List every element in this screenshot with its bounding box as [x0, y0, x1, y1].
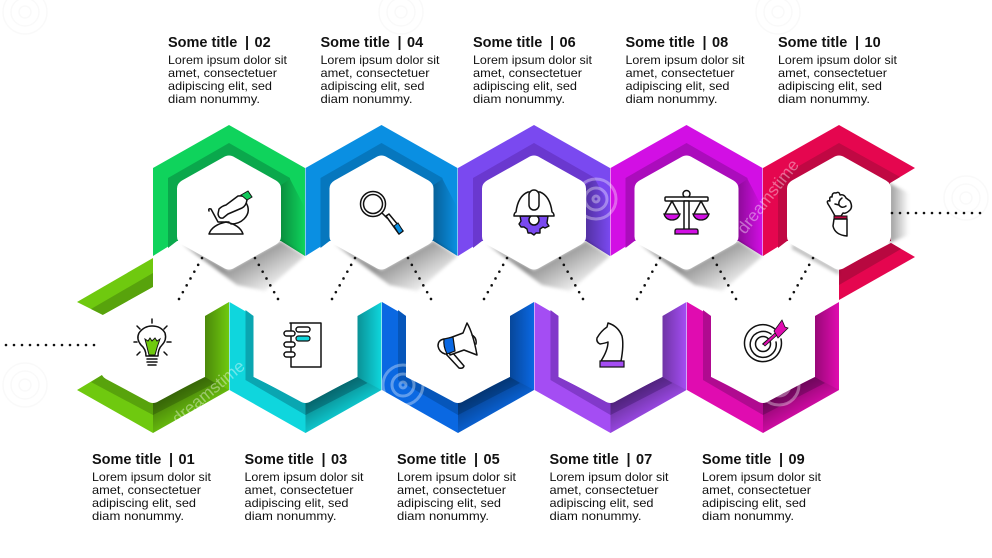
icon: chess knight	[597, 323, 624, 367]
white hexagons	[101, 156, 891, 403]
text: step 09: diam nonummy.	[702, 510, 794, 523]
text: step 04: Some title	[320, 35, 390, 51]
icon: balance scales	[664, 190, 709, 234]
text: step 10	[778, 35, 898, 106]
text: step 08: Lorem ipsum dolor sit	[626, 54, 745, 67]
hexagon 06 band	[458, 125, 610, 291]
watermark marks on bands: dreamstime	[733, 156, 803, 237]
hexagon 03 band	[230, 302, 382, 433]
icon: ok hand	[827, 192, 852, 236]
text: step 03: diam nonummy.	[244, 510, 336, 523]
text: step 08	[626, 35, 745, 106]
text: step 07: diam nonummy.	[550, 510, 642, 523]
text: step 02: Lorem ipsum dolor sit	[168, 54, 288, 67]
dotted line: start	[6, 344, 102, 346]
text: step 04: amet, consectetuer	[320, 67, 430, 80]
text: step 06: Lorem ipsum dolor sit	[473, 54, 593, 67]
text: step 01: Lorem ipsum dolor sit	[92, 471, 212, 484]
text: step 05: Lorem ipsum dolor sit	[397, 471, 517, 484]
text: step 02: |	[245, 35, 249, 51]
text: step 10: Lorem ipsum dolor sit	[778, 54, 898, 67]
text: step 05: diam nonummy.	[397, 510, 489, 523]
text: step 06: Some title	[473, 35, 542, 51]
text: step 05: amet, consectetuer	[397, 484, 506, 497]
text: step 08: adipiscing elit, sed	[626, 80, 730, 93]
text: step 10: amet, consectetuer	[778, 67, 887, 80]
text: step 03: amet, consectetuer	[244, 484, 354, 497]
text: step 01	[92, 452, 212, 523]
text: step 06: amet, consectetuer	[473, 67, 582, 80]
text: step 04: Lorem ipsum dolor sit	[320, 54, 440, 67]
text: step 07: Lorem ipsum dolor sit	[550, 471, 669, 484]
icon: light bulb	[134, 319, 171, 365]
hexagon 10 band	[763, 125, 915, 300]
hexagon 01 band	[77, 258, 229, 433]
text: step 07: 07	[636, 452, 652, 468]
text: step 06: diam nonummy.	[473, 93, 565, 106]
dotted connectors	[179, 258, 813, 299]
text: step 07: |	[626, 452, 631, 468]
text: step 02	[168, 35, 288, 106]
text: step 05: |	[474, 452, 478, 468]
text: step 07: adipiscing elit, sed	[550, 497, 654, 510]
hexagon 02 band	[153, 125, 305, 291]
text: step 10: Some title	[778, 35, 847, 51]
text: step 09	[702, 452, 822, 523]
text: step 05: adipiscing elit, sed	[397, 497, 501, 510]
text: step 08: |	[702, 35, 707, 51]
text: step 10: 10	[864, 35, 881, 51]
text: step 04: 04	[407, 35, 423, 51]
hexagon 05 band	[382, 302, 534, 433]
text: step 01: 01	[178, 452, 195, 468]
text: step 09: adipiscing elit, sed	[702, 497, 806, 510]
text: step 05: 05	[484, 452, 500, 468]
text: step 01: amet, consectetuer	[92, 484, 201, 497]
text: step 01: diam nonummy.	[92, 510, 184, 523]
text: step 02: 02	[254, 35, 271, 51]
icon: microscope	[209, 191, 252, 234]
text: step 10: diam nonummy.	[778, 93, 870, 106]
text: step 07: Some title	[550, 452, 619, 468]
text: step 08: Some title	[626, 35, 695, 51]
text: step 01: adipiscing elit, sed	[92, 497, 196, 510]
text: step 04: |	[398, 35, 402, 51]
text: step 02: diam nonummy.	[168, 93, 260, 106]
text: step 05: Some title	[397, 452, 466, 468]
hexagon 08 band	[610, 125, 762, 291]
text: step 07	[550, 452, 669, 523]
text: step 10: |	[855, 35, 859, 51]
text: step 09: amet, consectetuer	[702, 484, 811, 497]
icon: megaphone	[438, 323, 477, 368]
icon: magnifier	[360, 192, 403, 234]
text: step 07: amet, consectetuer	[550, 484, 659, 497]
text: step 09: 09	[788, 452, 805, 468]
icon: notebook	[284, 323, 321, 367]
text: step 10: adipiscing elit, sed	[778, 80, 882, 93]
text: step 09: |	[779, 452, 783, 468]
text: step 02: adipiscing elit, sed	[168, 80, 272, 93]
icon: helmet and gear	[514, 190, 554, 235]
watermark marks on bands: dreamstime	[168, 356, 249, 428]
watermark marks on bands	[168, 156, 803, 428]
text: step 08: diam nonummy.	[626, 93, 718, 106]
text: step 03: |	[322, 452, 326, 468]
hexagon 07 band	[534, 302, 686, 433]
text: step 03: adipiscing elit, sed	[244, 497, 348, 510]
text: step 04	[320, 35, 440, 106]
text: step 06: 06	[560, 35, 576, 51]
text: step 03: Lorem ipsum dolor sit	[244, 471, 364, 484]
text: step 08: 08	[712, 35, 728, 51]
text: step 01: |	[169, 452, 173, 468]
text: step 02: Some title	[168, 35, 237, 51]
watermark marks on background	[3, 0, 988, 407]
text: step 09: Some title	[702, 452, 771, 468]
text: step 02: amet, consectetuer	[168, 67, 277, 80]
text: step 06: adipiscing elit, sed	[473, 80, 577, 93]
text: step 01: Some title	[92, 452, 161, 468]
icon: target with arrow	[744, 320, 788, 362]
text: step 09: Lorem ipsum dolor sit	[702, 471, 822, 484]
hexagon 09 band	[687, 302, 839, 433]
text: step 06: |	[550, 35, 554, 51]
text: step 05	[397, 452, 517, 523]
hexagon 04 band	[306, 125, 458, 291]
text: step 06	[473, 35, 593, 106]
text: step 03: Some title	[244, 452, 314, 468]
text: step 04: adipiscing elit, sed	[320, 80, 424, 93]
text: step 08: amet, consectetuer	[626, 67, 735, 80]
dotted line: end	[892, 212, 988, 214]
text: step 04: diam nonummy.	[320, 93, 412, 106]
text: step 03	[244, 452, 364, 523]
text: step 03: 03	[331, 452, 347, 468]
